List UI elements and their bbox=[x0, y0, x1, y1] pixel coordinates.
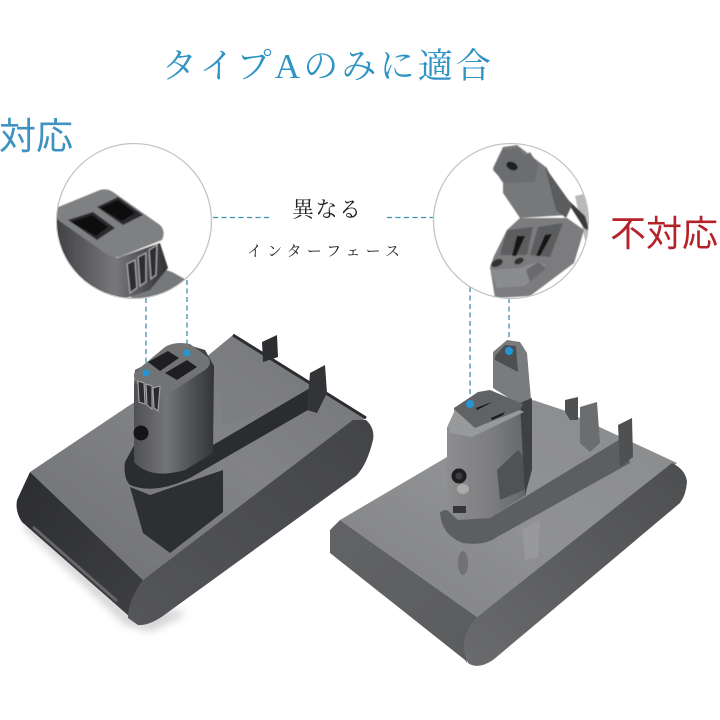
battery front face bbox=[17, 472, 143, 617]
zoom circle: incompatible connector bbox=[434, 144, 592, 298]
caption: different interface bbox=[247, 197, 400, 260]
connector tower bbox=[134, 344, 214, 474]
reflection bbox=[522, 520, 540, 560]
connector tower bbox=[447, 392, 532, 520]
battery top face bbox=[30, 335, 366, 580]
battery: incompatible type bbox=[330, 340, 687, 666]
caption: different interface: 異なる bbox=[292, 197, 361, 222]
label: compatible: 対応 bbox=[0, 116, 73, 157]
caption: different interface: インターフェース bbox=[247, 243, 400, 260]
lens bbox=[452, 468, 466, 484]
battery: compatible type A bbox=[17, 335, 373, 632]
battery end cap bbox=[128, 420, 373, 625]
tabs bbox=[262, 335, 278, 362]
blue marker dots bbox=[466, 347, 513, 408]
battery end cap bbox=[464, 463, 687, 666]
battery front highlight bbox=[33, 527, 117, 601]
arm and collar bbox=[440, 438, 630, 544]
tabs bbox=[565, 397, 633, 467]
battery front face bbox=[330, 520, 477, 663]
tower blade bbox=[493, 340, 532, 412]
reflection on top face bbox=[130, 470, 223, 553]
zoom circle: compatible connector bbox=[50, 144, 212, 300]
tower top bbox=[454, 390, 523, 428]
tower collar and arm bbox=[125, 388, 320, 489]
connector lines bbox=[146, 218, 509, 402]
jack bbox=[134, 426, 148, 440]
blue marker dots bbox=[142, 350, 190, 376]
label: not compatible: 不対応 bbox=[610, 213, 718, 254]
panel outline bbox=[233, 335, 366, 418]
battery top face bbox=[340, 400, 677, 617]
title: タイプAのみに適合 bbox=[162, 47, 491, 86]
